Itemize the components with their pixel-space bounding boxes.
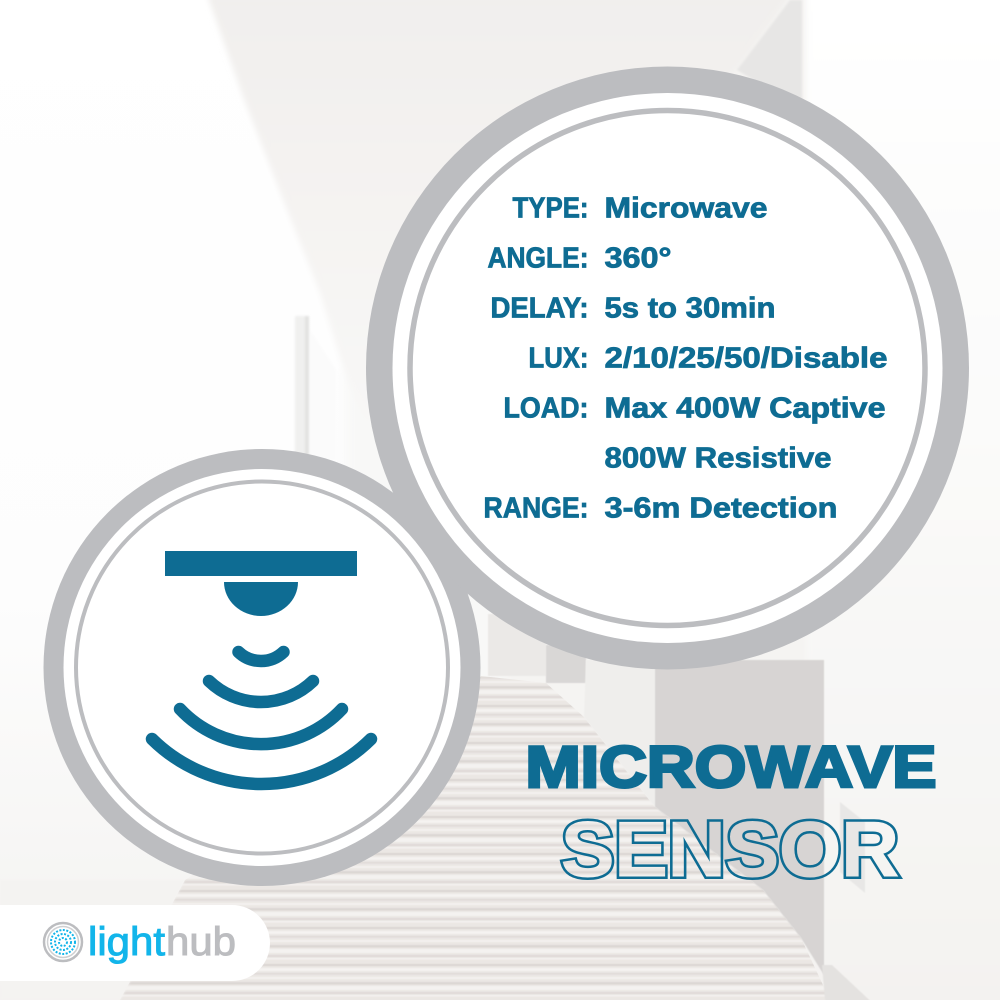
title: SENSOR [561,805,899,893]
logo wordmark: light [88,920,165,964]
spec labels: ANGLE: [488,242,588,274]
spec values: 800W Resistive [604,442,832,474]
logo wordmark: hub [166,920,236,964]
upper right door frame [737,0,802,100]
ceiling [207,0,790,420]
icon: sensor dome [224,582,298,616]
corridor right wall [584,660,655,807]
far corridor [345,370,505,690]
spec values: Max 400W Captive [604,392,886,424]
icon: ceiling bar [165,551,357,576]
lower left wall shade [0,880,185,1000]
spec labels: RANGE: [484,492,588,524]
far dark panel [546,645,586,683]
title: MICROWAVE [526,735,936,800]
spec labels: LUX: [528,342,588,374]
large circle: specifications [366,66,969,670]
spec labels [484,192,588,524]
spec labels: LOAD: [504,392,588,424]
spec labels: DELAY: [490,292,588,324]
far door [488,614,546,676]
small circle: sensor icon [44,449,480,886]
spec values: 5s to 30min [604,292,776,324]
right wall [806,0,1000,1000]
spec values: 360° [604,242,672,274]
spec values [604,192,888,524]
icon: microwave waves [152,652,371,784]
spec values: Microwave [604,192,768,224]
spec labels: TYPE: [512,192,588,224]
left wall picture frame [295,316,336,466]
spec values: 3-6m Detection [604,492,838,524]
logo pill [0,905,270,981]
carpet [120,676,825,1000]
wall plate [840,802,865,893]
logo wordmark [88,920,236,964]
title [528,744,936,880]
spec values: 2/10/25/50/Disable [604,342,888,374]
skirting [822,965,880,1000]
icon: lighthub logo mark [44,923,82,961]
left wall [0,0,420,1000]
dark door [655,660,824,975]
